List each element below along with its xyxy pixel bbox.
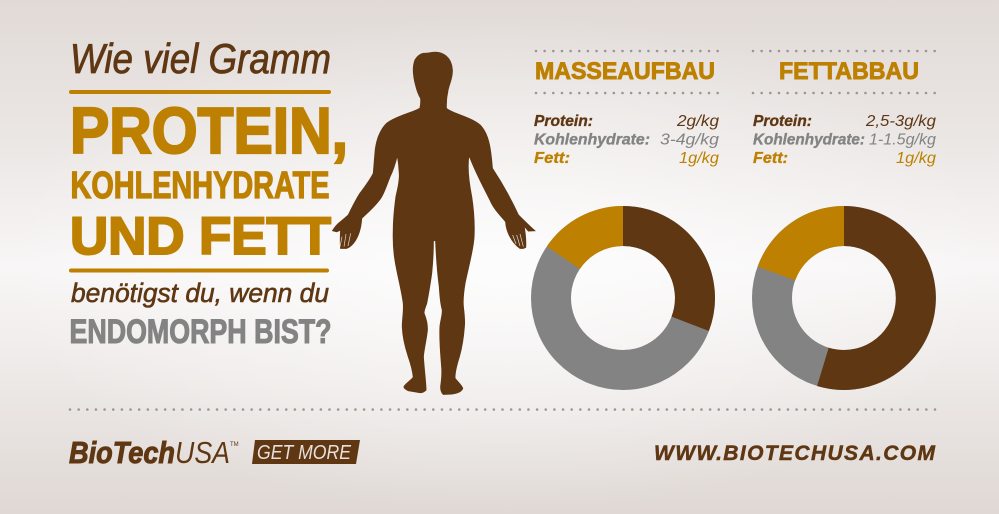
divider dots top [753, 50, 938, 52]
row: protein label: Protein: [534, 113, 593, 130]
divider dots bottom [753, 92, 938, 94]
title line: Protein: PROTEIN, [70, 94, 348, 167]
title line: und Fett: UND FETT [70, 207, 331, 266]
logo: BioTechUSA: BioTech [69, 435, 175, 470]
row: fat label: Fett: [753, 150, 788, 167]
divider dots top [536, 50, 720, 52]
panel: Fettabbau [753, 51, 938, 167]
website url: WWW.BIOTECHUSA.COM [654, 442, 936, 465]
lower gold rule [69, 268, 329, 272]
heading: Masseaufbau: MASSEAUFBAU [535, 58, 715, 85]
upper gold rule [69, 90, 331, 94]
footer divider [70, 408, 936, 411]
row: protein value: 2g/kg [676, 113, 719, 130]
row: fat value: 1g/kg [679, 150, 719, 167]
row: fat label: Fett: [534, 150, 570, 167]
panel: Masseaufbau [534, 51, 720, 167]
title line: Wie viel Gramm: Wie viel Gramm [70, 35, 331, 82]
row: carbohydrate value: 3-4g/kg [660, 132, 719, 148]
row: carbohydrate label: Kohlenhydrate: [534, 132, 650, 148]
icon: body silhouette [333, 52, 535, 394]
badge: Get More: GET MORE [257, 442, 352, 464]
subtitle line: Endomorph: ENDOMORPH BIST? [70, 313, 332, 351]
donut chart: Masseaufbau [551, 226, 695, 370]
logo: BioTechUSA: TM [230, 442, 239, 448]
title line: Kohlenhydrate: KOHLENHYDRATE [70, 165, 330, 207]
row: protein label: Protein: [753, 113, 812, 130]
row: carbohydrate value: 1-1.5g/kg [869, 132, 936, 148]
donut chart: Fettabbau [772, 226, 916, 370]
row: fat value: 1g/kg [896, 150, 936, 167]
subtitle line: benötigst du, wenn du [71, 278, 329, 308]
logo: BioTechUSA: USA [175, 435, 230, 470]
row: protein value: 2,5-3g/kg [865, 113, 936, 130]
title block [69, 35, 348, 351]
heading: Fettabbau: FETTABBAU [779, 58, 919, 85]
divider dots bottom [536, 92, 720, 94]
row: carbohydrate label: Kohlenhydrate: [753, 132, 865, 148]
